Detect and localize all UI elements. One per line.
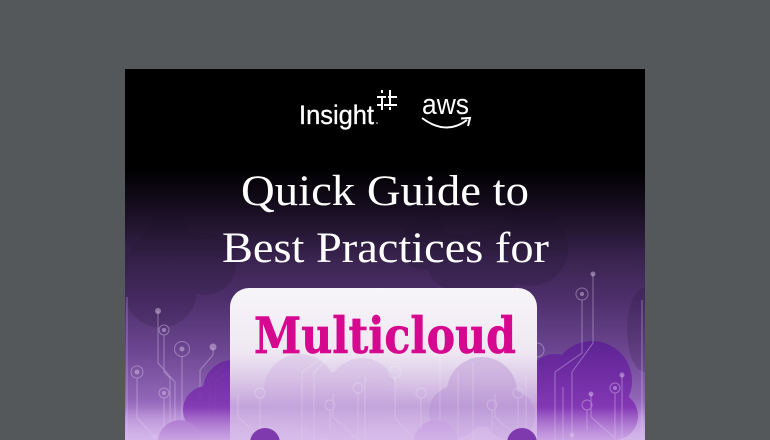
- cloud: front left: [183, 360, 263, 440]
- title: Best Practices for: [222, 225, 549, 272]
- icon: Insight mark: [377, 90, 397, 110]
- small cloud bottom left: [250, 428, 280, 440]
- title: [222, 168, 549, 272]
- bottom glow: [125, 408, 645, 440]
- circuit nodes right: [570, 272, 624, 438]
- cloud: front left low: [158, 420, 202, 440]
- right circuit traces: [530, 274, 642, 440]
- left circuit traces: [127, 297, 230, 440]
- cloud inside card right: [429, 357, 535, 440]
- circuit traces inside card: [238, 342, 526, 440]
- Multicloud heading: Multicloud: [254, 306, 516, 365]
- background clouds: [125, 210, 645, 372]
- title: Quick Guide to: [241, 168, 529, 215]
- card: title plate: [230, 288, 537, 440]
- logo: aws: aws: [422, 89, 469, 121]
- cloud inside card left: [264, 354, 396, 440]
- cloud inside card low: [414, 420, 458, 440]
- icon: aws smile: [422, 118, 470, 128]
- small cloud bottom right: [507, 428, 537, 440]
- cloud: front right: [515, 341, 638, 440]
- logo: Insight: [299, 90, 397, 130]
- circuit nodes left: [134, 308, 220, 440]
- logo: Insight: Insight: [299, 100, 374, 130]
- panel: cover: [125, 69, 645, 440]
